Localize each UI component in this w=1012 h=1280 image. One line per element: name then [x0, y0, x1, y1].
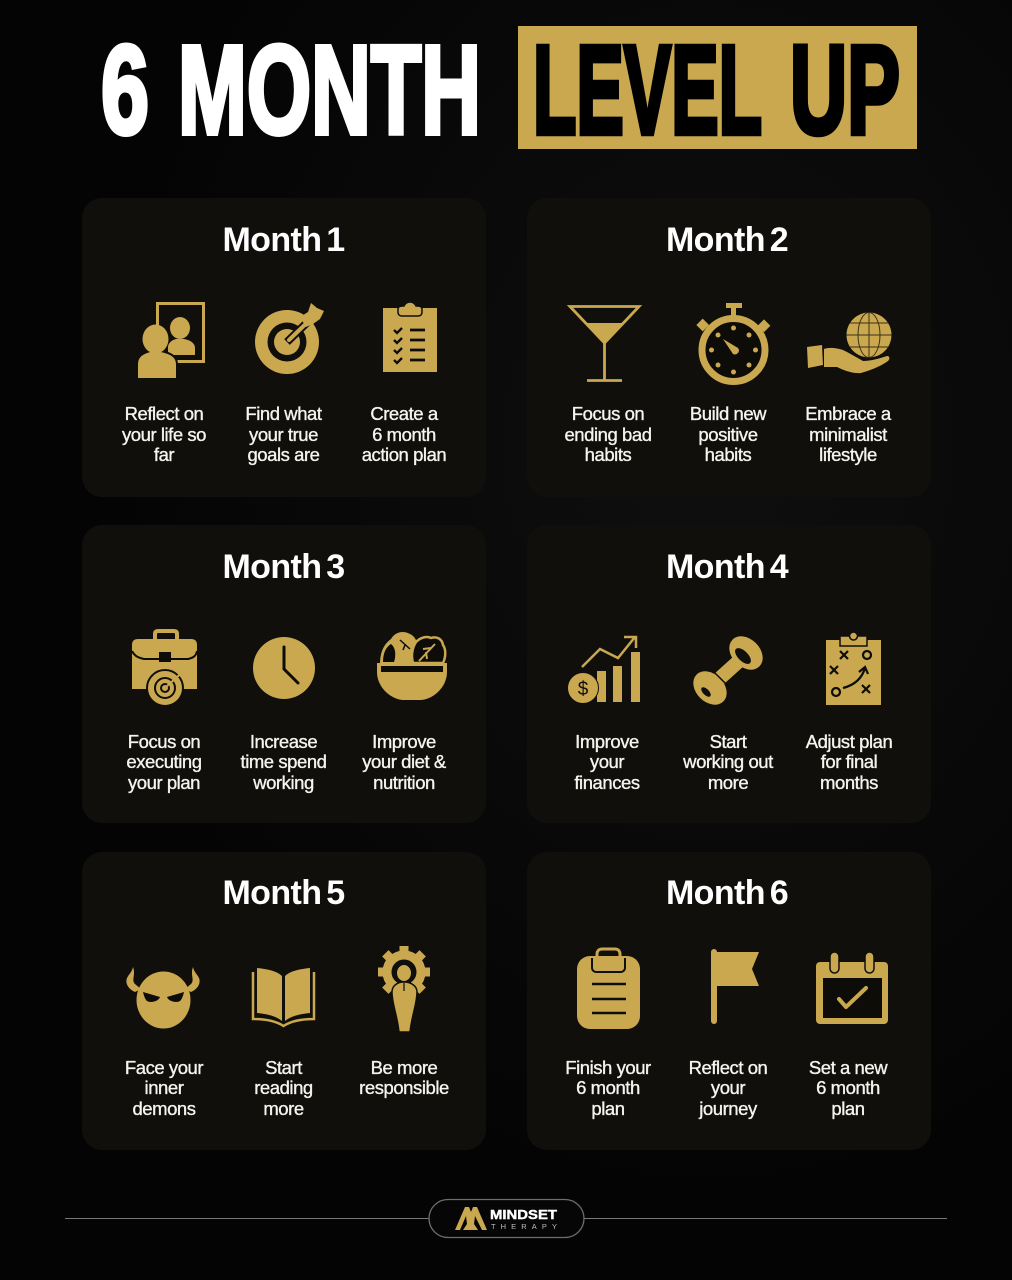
text: Embrace a minimalist lifestyle: lifestyle: [819, 444, 877, 465]
text: Start working out more: working out: [682, 751, 773, 772]
text: Start reading more: Start: [265, 1057, 302, 1078]
panel: Month 1: [82, 198, 486, 497]
text: Set a new 6 month plan: Set a new: [809, 1057, 888, 1078]
icon: person and mirror portrait: [137, 304, 204, 379]
text: Build new positive habits: positive: [698, 424, 758, 445]
text: Increase time spend working: time spend: [240, 751, 327, 772]
heading: Month 5: Month 5: [222, 874, 345, 912]
title badge: LEVEL UP: UP: [790, 20, 900, 160]
text: Embrace a minimalist lifestyle: minimalist: [809, 424, 887, 445]
icon: hand holding globe: [807, 312, 892, 373]
logo mark: [455, 1207, 487, 1230]
text: Focus on executing your plan: executing: [126, 751, 202, 772]
panel: Month 2: [527, 198, 931, 497]
text: Reflect on your journey: your: [711, 1077, 745, 1098]
text: Finish your 6 month plan: Finish your: [565, 1057, 651, 1078]
icon: target with arrow: [255, 303, 324, 374]
text: Find what your true goals are: Find what: [245, 403, 322, 424]
icon: stopwatch: [696, 303, 770, 382]
heading: Month 3: Month 3: [222, 548, 345, 586]
text: Adjust plan for final months: Adjust plan: [806, 731, 892, 752]
icon: clock: [253, 637, 315, 699]
panel: Month 5: [82, 852, 486, 1150]
text: Reflect on your journey: journey: [698, 1098, 758, 1119]
icon: flag: [711, 949, 759, 1024]
text: Face your inner demons: Face your: [125, 1057, 203, 1078]
icon: gear with person: [378, 946, 430, 1032]
icon: calendar with check: [816, 952, 888, 1024]
title: 6 MONTH: 6: [101, 20, 149, 160]
text: Set a new 6 month plan: 6 month: [816, 1077, 880, 1098]
text: Create a 6 month action plan: Create a: [370, 403, 439, 424]
text: Find what your true goals are: goals are: [247, 444, 320, 465]
text: Reflect on your life so far: your life so: [122, 424, 206, 445]
text: Reflect on your journey: Reflect on: [689, 1057, 768, 1078]
text: Improve your diet & nutrition: Improve: [372, 731, 436, 752]
icon: finance growth chart: [568, 637, 640, 704]
text: Focus on executing your plan: Focus on: [128, 731, 200, 752]
text: Focus on executing your plan: your plan: [128, 772, 200, 793]
text: Face your inner demons: inner: [145, 1077, 184, 1098]
icon: notes clipboard: [577, 949, 640, 1029]
text: Focus on ending bad habits: habits: [585, 444, 632, 465]
icon: dumbbell: [687, 630, 769, 711]
text: Create a 6 month action plan: 6 month: [372, 424, 436, 445]
text: Finish your 6 month plan: plan: [591, 1098, 625, 1119]
title: 6 MONTH: MONTH: [178, 20, 481, 160]
text: Find what your true goals are: your true: [249, 424, 318, 445]
heading: Month 1: Month 1: [222, 221, 345, 259]
text: Adjust plan for final months: for final: [821, 751, 877, 772]
icon: salad bowl: [377, 632, 447, 700]
text: Focus on ending bad habits: Focus on: [572, 403, 644, 424]
logo text: THERAPY: THERAPY: [491, 1222, 557, 1231]
text: Face your inner demons: demons: [132, 1098, 196, 1119]
heading: Month 6: Month 6: [666, 874, 788, 912]
logo text: MINDSET: MINDSET: [490, 1207, 557, 1222]
text: Improve your finances: finances: [574, 772, 640, 793]
heading: Month 2: Month 2: [666, 221, 788, 259]
panel: Month 3: [82, 525, 486, 823]
text: Be more responsible: Be more: [371, 1057, 438, 1078]
icon: checklist clipboard: [383, 302, 437, 372]
text: Be more responsible: responsible: [359, 1077, 449, 1098]
text: Embrace a minimalist lifestyle: Embrace a: [805, 403, 892, 424]
text: Adjust plan for final months: months: [820, 772, 878, 793]
text: Set a new 6 month plan: plan: [831, 1098, 865, 1119]
text: Increase time spend working: Increase: [250, 731, 317, 752]
text: Improve your diet & nutrition: nutrition: [373, 772, 435, 793]
heading: Month 4: Month 4: [666, 548, 789, 586]
text: Start reading more: more: [263, 1098, 304, 1119]
text: Improve your diet & nutrition: your diet &: [362, 751, 447, 772]
text: Start working out more: more: [708, 772, 748, 793]
text: Focus on ending bad habits: ending bad: [564, 424, 652, 445]
panel: Month 4: [527, 525, 931, 823]
icon: strategy clipboard: [826, 632, 881, 705]
icon: devil face: [126, 967, 200, 1028]
title: 6 MONTH: [101, 20, 481, 160]
text: Reflect on your life so far: Reflect on: [125, 403, 204, 424]
footer logo badge: [429, 1200, 584, 1238]
icon: open book: [253, 968, 314, 1026]
text: Build new positive habits: Build new: [690, 403, 767, 424]
text: Increase time spend working: working: [252, 772, 314, 793]
text: Reflect on your life so far: far: [154, 444, 174, 465]
text: Start working out more: Start: [710, 731, 747, 752]
icon: briefcase with target: [132, 631, 197, 706]
text: Improve your finances: your: [590, 751, 624, 772]
icon: martini glass: [570, 306, 639, 380]
panel: Month 6: [527, 852, 931, 1150]
text: Start reading more: reading: [254, 1077, 313, 1098]
icon: finance growth chart: $: [578, 679, 589, 700]
text: Build new positive habits: habits: [705, 444, 752, 465]
text: Finish your 6 month plan: 6 month: [576, 1077, 640, 1098]
text: Create a 6 month action plan: action plan: [362, 444, 446, 465]
title badge: LEVEL UP: LEVEL: [533, 20, 762, 160]
text: Improve your finances: Improve: [575, 731, 639, 752]
